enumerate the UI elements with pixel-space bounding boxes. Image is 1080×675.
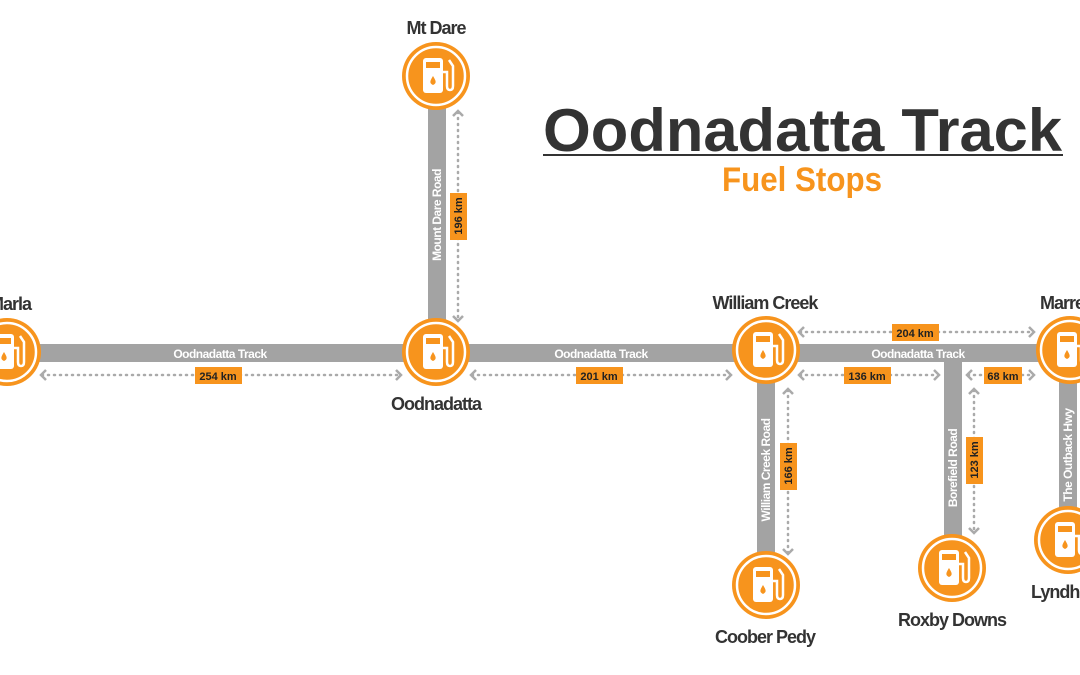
distance: 166 km: 166 km	[783, 447, 795, 485]
stop: Roxby Downs	[898, 534, 1007, 630]
stop: Lyndhurst	[1031, 506, 1080, 602]
distance: 204 km: 204 km	[896, 328, 934, 340]
distance: 204 km	[799, 324, 1034, 341]
road: William Creek Road	[757, 360, 775, 560]
stop: Oodnadatta: Oodnadatta	[391, 394, 483, 414]
stop: William Creek: William Creek	[713, 293, 819, 313]
road: Oodnadatta Track: Oodnadatta Track	[554, 347, 648, 361]
stop: Coober Pedy	[715, 551, 816, 647]
title: Fuel Stops	[722, 161, 882, 199]
road: Mount Dare Road	[428, 100, 446, 350]
distance: 123 km	[966, 389, 983, 533]
stop: Mt Dare: Mt Dare	[406, 18, 466, 38]
distance: 68 km: 68 km	[987, 371, 1019, 383]
road: The Outback Hwy: The Outback Hwy	[1061, 408, 1075, 502]
stop: Mt Dare	[402, 18, 470, 110]
distance: 68 km	[967, 367, 1034, 384]
distance: 136 km	[799, 367, 939, 384]
road: Borefield Road	[944, 360, 962, 545]
stop: Marree	[1036, 293, 1080, 384]
stop: Coober Pedy: Coober Pedy	[715, 627, 816, 647]
title: Oodnadatta Track	[543, 97, 1063, 164]
road: Oodnadatta Track	[0, 344, 1080, 362]
distance: 136 km: 136 km	[848, 371, 886, 383]
distance: 201 km: 201 km	[580, 371, 618, 383]
road: Borefield Road: Borefield Road	[946, 429, 960, 507]
stop: William Creek	[713, 293, 819, 384]
distance: 196 km: 196 km	[453, 197, 465, 235]
road: The Outback Hwy	[1059, 360, 1077, 520]
road: Oodnadatta Track: Oodnadatta Track	[871, 347, 966, 361]
road: Mount Dare Road: Mount Dare Road	[430, 169, 444, 261]
stop: Roxby Downs: Roxby Downs	[898, 610, 1007, 630]
stop: Marla	[0, 294, 41, 386]
distance: 254 km: 254 km	[199, 371, 237, 383]
title	[543, 97, 1063, 199]
distance: 123 km: 123 km	[969, 441, 981, 479]
distance: 254 km	[41, 367, 401, 384]
stop: Oodnadatta	[391, 318, 483, 414]
distance: 166 km	[780, 389, 797, 554]
road: William Creek Road: William Creek Road	[759, 418, 773, 521]
distance: 201 km	[471, 367, 731, 384]
road: Oodnadatta Track: Oodnadatta Track	[173, 347, 268, 361]
distance: 196 km	[450, 111, 467, 321]
